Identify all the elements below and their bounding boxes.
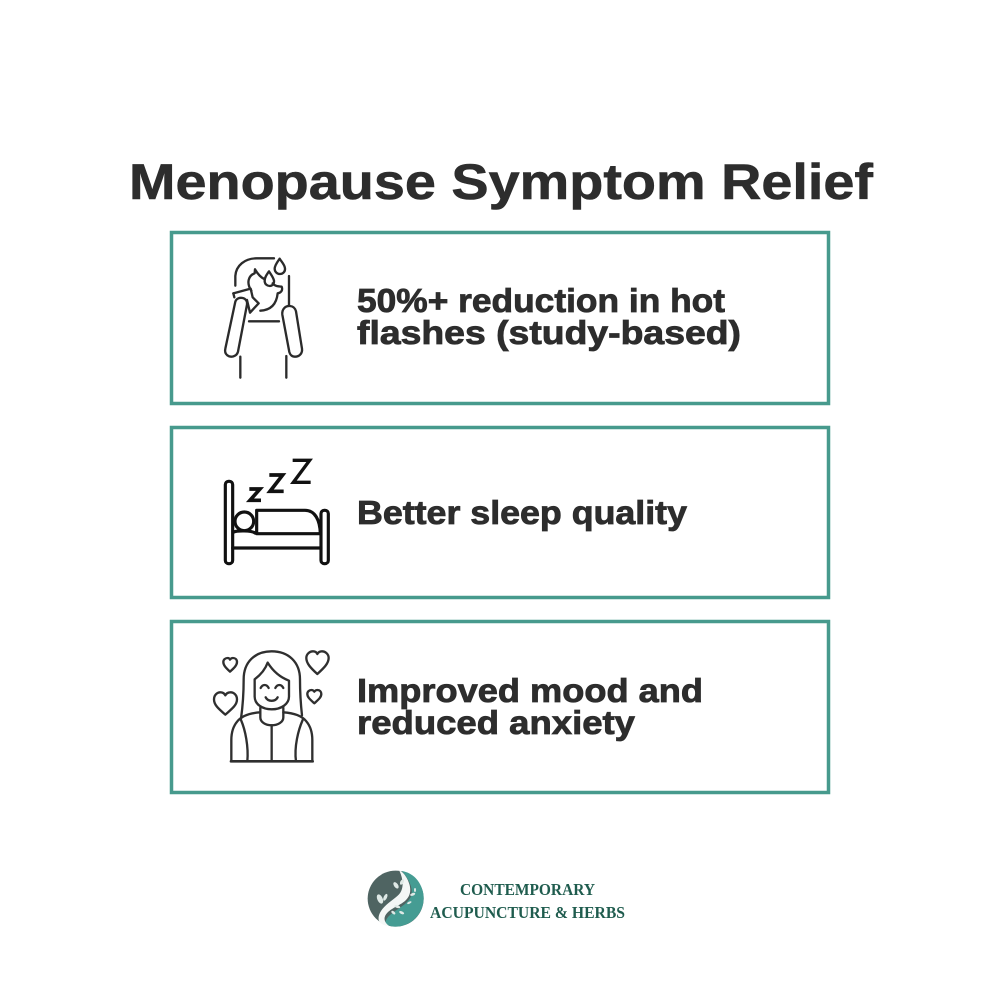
logo text: ACUPUNCTURE & HERBS	[430, 903, 625, 922]
text: mood: reduced anxiety	[357, 704, 636, 741]
title: Menopause Symptom Relief	[129, 154, 873, 210]
text: mood: Improved mood and	[357, 672, 703, 709]
text: sleep: Better sleep quality	[357, 494, 688, 531]
text: hot flashes	[357, 282, 741, 351]
panel: sleep	[172, 428, 828, 598]
logo	[368, 871, 625, 927]
logo text	[430, 880, 625, 922]
panel: mood	[172, 622, 828, 792]
icon: smiling woman with hearts	[214, 651, 329, 761]
icon: woman wiping sweat	[225, 258, 302, 378]
text: hot flashes: flashes (study-based)	[357, 314, 741, 351]
icon: person sleeping in bed	[225, 460, 328, 564]
text: hot flashes: 50%+ reduction in hot	[357, 282, 725, 319]
panel: hot flashes	[172, 232, 828, 404]
text: mood	[357, 672, 703, 741]
icon: yin-yang tree logo	[368, 871, 424, 927]
logo text: CONTEMPORARY	[460, 880, 595, 899]
